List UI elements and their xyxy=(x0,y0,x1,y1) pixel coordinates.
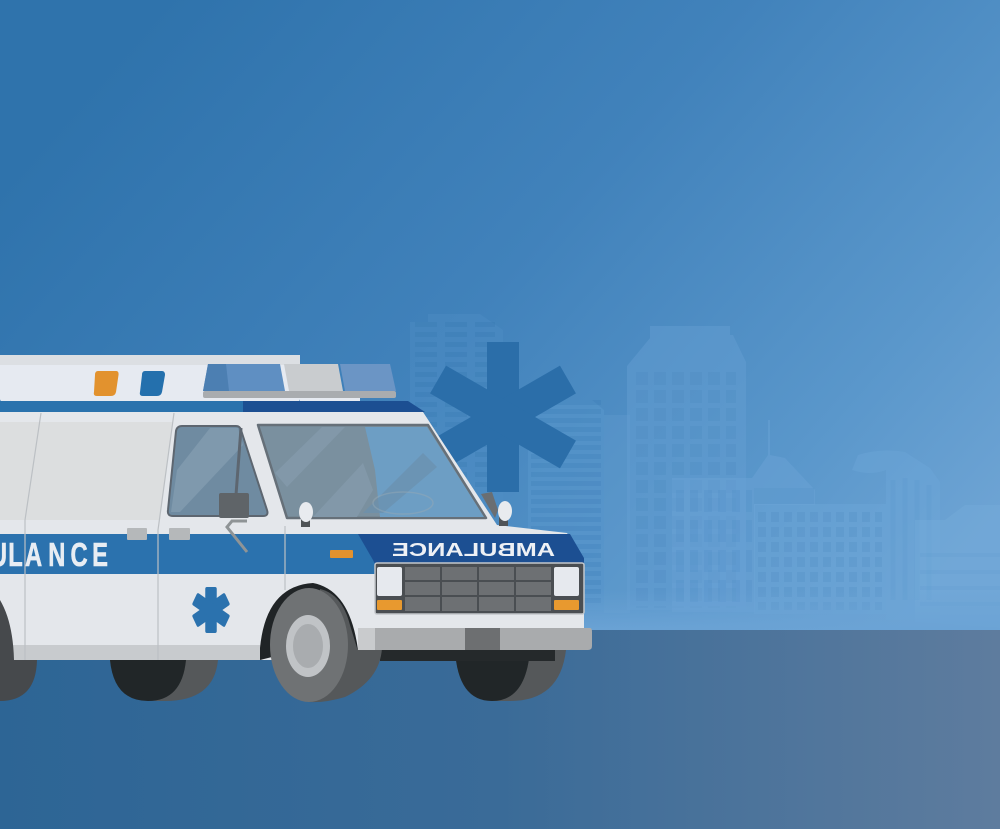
windshield xyxy=(258,425,486,518)
building: rounded tower xyxy=(852,451,940,620)
sky background xyxy=(0,0,1000,630)
building: left tower behind asterisk xyxy=(410,314,503,505)
upper side panel shading xyxy=(0,422,172,520)
hub xyxy=(286,615,330,677)
near rear wheel and arch xyxy=(0,600,37,701)
building: narrow block xyxy=(604,415,630,613)
orange side marker xyxy=(330,550,353,558)
door handles xyxy=(127,528,190,540)
far front wheel xyxy=(455,650,566,701)
grille slats xyxy=(405,567,551,611)
underbody xyxy=(380,648,555,661)
side window xyxy=(168,426,268,516)
tyre tread xyxy=(309,589,382,702)
mirrored hood lettering: AMBULANCE xyxy=(392,540,555,560)
body seams xyxy=(25,413,285,660)
front bumper xyxy=(358,628,592,650)
side mirror xyxy=(219,493,249,552)
side blue stripe xyxy=(0,534,378,574)
right headlight xyxy=(554,567,579,596)
building: wide block xyxy=(754,504,886,614)
left headlight xyxy=(377,567,402,596)
left indicator xyxy=(377,600,402,610)
horizon haze xyxy=(500,590,1000,630)
roof light bar xyxy=(203,364,396,398)
orange marker light xyxy=(94,371,119,396)
building: striped block xyxy=(528,400,604,610)
roof stripe xyxy=(0,401,425,412)
ground xyxy=(0,630,1000,829)
roof box xyxy=(0,355,360,402)
front wheel arch xyxy=(260,583,358,660)
lower skirt xyxy=(0,645,262,660)
building: domed low block xyxy=(672,420,815,612)
blue marker light xyxy=(140,371,165,396)
near front wheel xyxy=(270,588,382,702)
building: far right block xyxy=(915,505,1000,628)
van body xyxy=(0,412,584,660)
far rear wheel xyxy=(110,660,218,701)
building: main tower xyxy=(627,326,746,610)
wing mirrors xyxy=(299,492,512,527)
tyre face xyxy=(270,588,348,702)
small star of life xyxy=(192,587,230,633)
front blue hood band xyxy=(358,534,584,564)
grille and headlights xyxy=(375,563,584,614)
city skyline xyxy=(410,314,1000,630)
ambulance xyxy=(0,355,592,702)
right indicator xyxy=(554,600,579,610)
large star of life emblem xyxy=(430,342,576,492)
